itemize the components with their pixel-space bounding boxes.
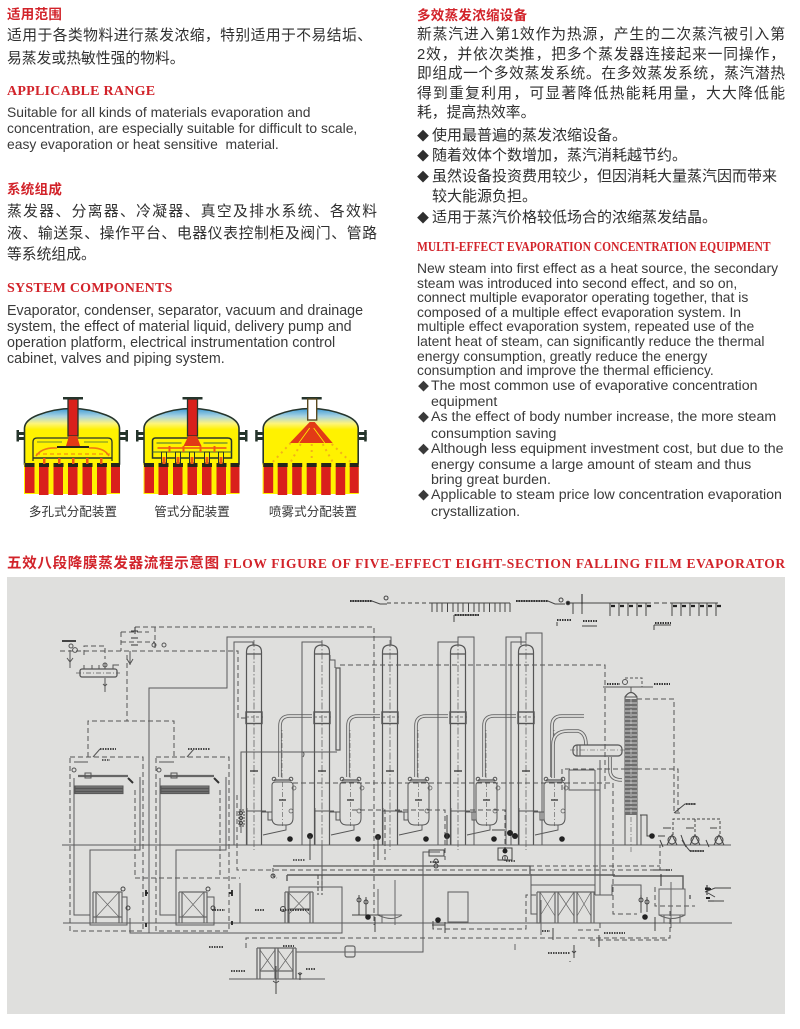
text block: system components (Chinese): 等系统组成。	[7, 247, 96, 263]
list: features: ◆	[418, 381, 429, 393]
text block: multi-effect description (Chinese): 得到重复利用，可显著降低热能耗用量，大大降低能	[417, 86, 785, 102]
list: features: energy consume a large amount of steam and thus	[431, 457, 751, 473]
list: features (Chinese): 较大能源负担。	[432, 188, 537, 205]
text block: system components	[7, 303, 363, 367]
list: features: equipment	[431, 394, 497, 410]
list: features	[418, 378, 784, 520]
chart: plate tanks	[93, 880, 685, 979]
text block: applicable range: Suitable for all kinds of materials evaporation and	[7, 104, 310, 120]
text block: multi-effect description: multiple effect evaporation system, repeated use of the	[417, 318, 754, 334]
heading: applicable range (Chinese): 适用范围	[7, 7, 62, 22]
heading: system components (Chinese): 系统组成	[7, 182, 62, 197]
text block: multi-effect description: energy consumption, greatly reduce the energy	[417, 348, 707, 364]
heading: flow figure title: 五效八段降膜蒸发器流程示意图 FLOW FIGURE OF FIVE-EFFECT EIGHT-SECTION FALLING FILM EVAPORATOR	[7, 556, 786, 572]
list: features: The most common use of evaporative concentration	[431, 378, 757, 394]
text block: multi-effect description: connect multiple evaporator operating together, that is	[417, 289, 748, 305]
text block: system components: cabinet, valves and piping system.	[7, 351, 225, 367]
icon: perforated plate distributor	[16, 397, 128, 495]
list: features: ◆	[418, 412, 429, 424]
caption: perforated distributor: 多孔式分配装置	[29, 505, 117, 519]
list: features: ◆	[418, 444, 429, 456]
text block: applicable range: concentration, are especially suitable for difficult to scale,	[7, 120, 357, 136]
text block: multi-effect description: steam was introduced into second effect, and so on,	[417, 275, 737, 291]
text block: applicable range (Chinese): 适用于各类物料进行蒸发浓缩，特别适用于不易结垢、	[7, 28, 372, 44]
text block: multi-effect description (Chinese): 新蒸汽进入第1效作为热源，产生的二次蒸汽被引入第	[417, 27, 785, 43]
diagram background	[7, 577, 785, 1014]
heading: multi-effect equipment: MULTI-EFFECT EVAPORATION CONCENTRATION EQUIPMENT	[417, 239, 771, 254]
list: features: consumption saving	[431, 426, 556, 442]
text block: system components: operation platform, electrical instrumentation control	[7, 335, 335, 351]
text block: multi-effect description (Chinese)	[417, 26, 785, 121]
chart: dashed utility lines	[60, 627, 695, 948]
icon: tube distributor	[136, 397, 248, 495]
panel: distribution devices	[16, 397, 367, 495]
text block: applicable range	[7, 104, 357, 152]
text block: multi-effect description (Chinese): 2效，并依次类推，把多个蒸发器连接起来一同操作，	[417, 47, 785, 63]
list: features: ◆	[418, 490, 429, 502]
text block: system components (Chinese): 液、输送泵、操作平台、电器仪表控制柜及阀门、管路	[7, 226, 377, 242]
caption: tube distributor: 管式分配装置	[154, 505, 230, 519]
text block: system components: Evaporator, condenser, separator, vacuum and drainage	[7, 303, 363, 319]
list: features (Chinese): ◆随着效体个数增加，蒸汽消耗越节约。	[417, 147, 687, 164]
icon: spray distributor	[255, 397, 367, 495]
list: features: crystallization.	[431, 504, 520, 520]
text block: multi-effect description: latent heat of steam, can significantly reduce the thermal	[417, 333, 764, 349]
text block: system components: system, the effect of material liquid, delivery pump and	[7, 319, 352, 335]
heading: applicable range: APPLICABLE RANGE	[7, 84, 155, 99]
text block: multi-effect description (Chinese): 耗，提高热效率。	[417, 105, 535, 121]
chart: pumps and valves	[121, 804, 731, 994]
list: features (Chinese): ◆适用于蒸汽价格较低场合的浓缩蒸发结晶。	[417, 209, 717, 226]
chart: right column and exchanger	[570, 678, 670, 852]
text block: multi-effect description	[417, 260, 778, 378]
text block: applicable range (Chinese): 易蒸发或热敏性强的物料。	[7, 51, 185, 67]
chart: evaporator effects	[246, 640, 584, 850]
list: features: Although less equipment investment cost, but due to the	[431, 441, 784, 457]
chart: feed header and condensers	[62, 627, 219, 794]
chart: steam header	[350, 594, 721, 630]
text block: multi-effect description: composed of a multiple effect evaporation system. In	[417, 304, 741, 320]
text block: multi-effect description (Chinese): 即组成一个多效蒸发系统。在多效蒸发系统，蒸汽潜热	[417, 66, 785, 82]
list: features: bring great burden.	[431, 472, 551, 488]
list: features (Chinese)	[417, 127, 777, 226]
text block: multi-effect description: consumption and improve the thermal efficiency.	[417, 362, 714, 378]
list: features (Chinese): ◆虽然设备投资费用较少，但因消耗大量蒸汽因而带来	[417, 168, 777, 185]
text block: system components (Chinese): 蒸发器、分离器、冷凝器、真空及排水系统、各效料	[7, 204, 377, 220]
list: features (Chinese): ◆使用最普遍的蒸发浓缩设备。	[417, 127, 627, 144]
text block: system components (Chinese)	[7, 203, 377, 263]
chart: solid process lines	[62, 633, 732, 979]
heading: multi-effect equipment (Chinese): 多效蒸发浓缩设备	[417, 8, 527, 23]
list: features: Applicable to steam price low concentration evaporation	[431, 487, 782, 503]
text block: applicable range: easy evaporation or heat sensitive material.	[7, 136, 279, 152]
text block: multi-effect description: New steam into first effect as a heat source, the secondary	[417, 260, 778, 276]
heading: system components: SYSTEM COMPONENTS	[7, 281, 173, 296]
caption: spray distributor: 喷雾式分配装置	[269, 505, 357, 519]
text block: applicable range (Chinese)	[7, 27, 372, 67]
list: features: As the effect of body number increase, the more steam	[431, 409, 776, 425]
